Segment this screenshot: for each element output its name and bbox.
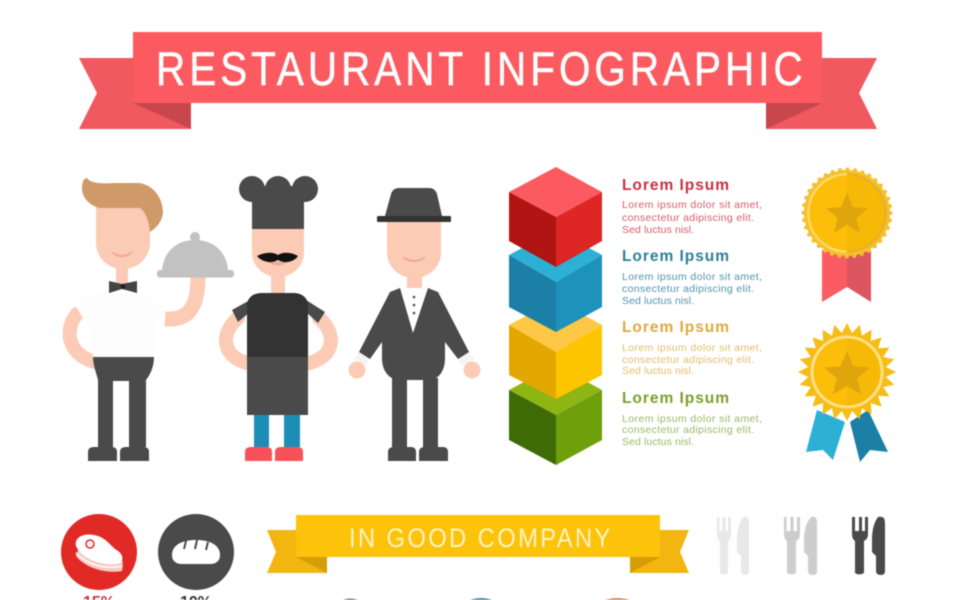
- text block: yellow: consectetur adipiscing elit.: [622, 354, 754, 366]
- icon: meat circle: [61, 514, 137, 590]
- text block: green: [622, 390, 762, 448]
- cube: green: [509, 365, 602, 465]
- text block: yellow: Sed luctus nisl.: [622, 365, 694, 377]
- text block: blue: [622, 248, 762, 307]
- text block: yellow: Lorem Ipsum: [622, 319, 729, 336]
- stacked cube chart: [509, 167, 602, 465]
- chef figure: [226, 176, 331, 461]
- secondary banner: [267, 515, 689, 573]
- cropped circles at page bottom: [343, 598, 630, 600]
- text block: red: Sed luctus nisl.: [622, 224, 694, 236]
- icon: cutlery light: [717, 517, 749, 575]
- cube: red: [509, 167, 602, 267]
- text block: blue: consectetur adipiscing elit.: [622, 283, 754, 295]
- text block: green: consectetur adipiscing elit.: [622, 424, 754, 436]
- text block: green: Lorem Ipsum: [622, 390, 729, 407]
- icon: bread circle: [158, 514, 234, 590]
- text block: red: Lorem ipsum dolor sit amet,: [622, 199, 762, 211]
- gentleman figure: [348, 188, 480, 461]
- cube: yellow: [509, 300, 602, 399]
- text block: green: Lorem ipsum dolor sit amet,: [622, 413, 762, 425]
- icon: cutlery medium: [784, 517, 817, 575]
- banner heading: IN GOOD COMPANY: [349, 524, 610, 553]
- icon: cutlery dark: [852, 517, 885, 575]
- medal: blue ribbons: [798, 323, 896, 462]
- text block: red: [622, 177, 762, 236]
- cube: blue: [509, 230, 602, 332]
- medal: red ribbon: [804, 170, 890, 302]
- text block: yellow: Lorem ipsum dolor sit amet,: [622, 342, 762, 354]
- waiter figure: [70, 178, 234, 461]
- title: RESTAURANT INFOGRAPHIC: [156, 43, 803, 96]
- icon: serving cloche: [157, 232, 234, 278]
- title banner: [79, 32, 877, 129]
- text block: blue: Sed luctus nisl.: [622, 295, 694, 307]
- text block: red: consectetur adipiscing elit.: [622, 212, 754, 224]
- text block: blue: Lorem Ipsum: [622, 248, 729, 265]
- text block: green: Sed luctus nisl.: [622, 436, 694, 448]
- text block: yellow: [622, 319, 762, 377]
- text block: red: Lorem Ipsum: [622, 177, 729, 194]
- text block: blue: Lorem ipsum dolor sit amet,: [622, 271, 762, 283]
